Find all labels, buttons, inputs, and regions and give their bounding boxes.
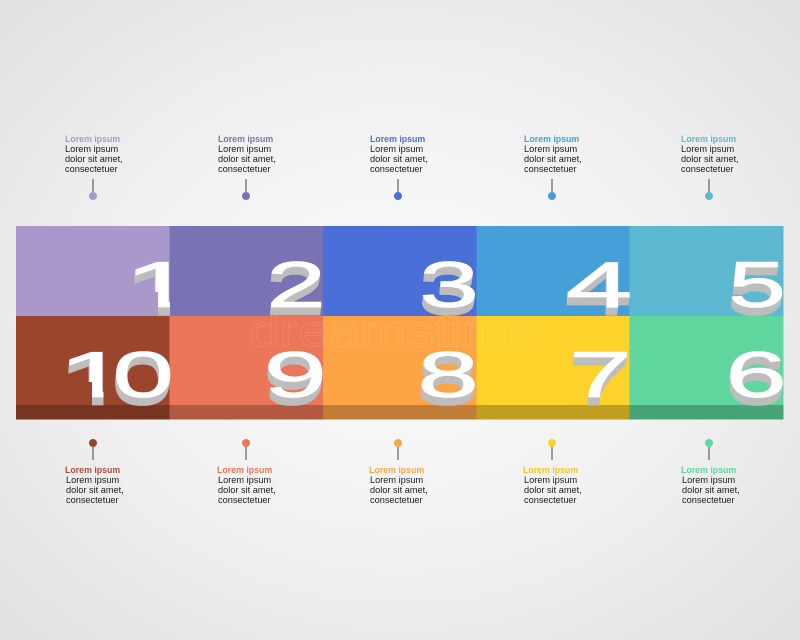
panel: colour grid [16,226,784,420]
number 5: 5 [728,253,786,325]
callout 8: dolor sit amet, [370,485,428,495]
number 2: 2 [266,248,326,321]
callout 1: Lorem ipsum [65,144,118,154]
callout 6: consectetuer [682,495,735,505]
number 4: 4 [565,255,632,327]
number 8: 8 [418,339,479,411]
number 7: 7 [568,340,632,413]
callout 2: Lorem ipsum [218,134,273,144]
callout 5: consectetuer [681,164,734,174]
number 9: 9 [263,344,326,417]
number 5: 5 [727,255,785,327]
number 2: 2 [266,252,326,325]
number 9: 9 [263,342,326,415]
callout 1: dolor sit amet, [65,154,123,164]
callout 5: Lorem ipsum [681,144,734,154]
number 9: 9 [264,338,327,411]
number 2: 2 [265,256,325,329]
callout 2 [218,134,276,200]
number 9: 9 [263,340,327,413]
number 4: 4 [565,251,632,323]
number 7: 7 [568,344,631,417]
number 6: 6 [725,343,786,415]
number 9: 9 [263,346,326,419]
number 6: 6 [726,339,787,411]
number 3: 3 [418,256,478,329]
callout 8: Lorem ipsum [370,475,423,485]
callout 6: Lorem ipsum [682,475,735,485]
callout 10: Lorem ipsum [66,475,119,485]
number 10: 1 [57,342,130,415]
number 1: 1 [123,250,196,323]
callout 2: Lorem ipsum [218,144,271,154]
callout 5: Lorem ipsum [681,134,736,144]
callout 3: Lorem ipsum [370,134,425,144]
number 4: 4 [566,249,632,321]
number 10: 0 [113,339,174,411]
number 2: 2 [266,250,326,323]
callout 7 [523,439,582,505]
callout 7: consectetuer [524,495,577,505]
number 8: 8 [417,341,479,413]
number 10: 1 [57,346,129,419]
number 1: 1 [123,254,195,327]
number 8: 8 [417,347,478,419]
callout 3: consectetuer [370,164,423,174]
number 5: 5 [728,251,786,323]
number 3: 3 [419,248,479,321]
number 5: 5 [728,249,786,321]
callout 7: Lorem ipsum [524,475,577,485]
callout 4: consectetuer [524,164,577,174]
callout 9: consectetuer [218,495,271,505]
callout 6: dolor sit amet, [682,485,740,495]
callout 10: consectetuer [66,495,119,505]
callout 8: Lorem ipsum [369,465,424,475]
callout 6: Lorem ipsum [681,465,736,475]
number 4: 4 [565,253,632,325]
callout 10 [65,439,124,505]
number 2: 2 [266,254,325,327]
callout 4 [524,134,582,200]
number 8: 8 [417,345,478,417]
number 1: 1 [123,256,195,329]
callout 3: dolor sit amet, [370,154,428,164]
callout 9: Lorem ipsum [217,465,272,475]
number 10: 1 [57,344,129,417]
callout 1 [65,134,123,200]
callout 4: Lorem ipsum [524,134,579,144]
callout 10: Lorem ipsum [65,465,120,475]
number 10: 0 [112,343,174,415]
number 1: 1 [124,248,196,321]
number 1 [134,262,170,316]
callout 6 [681,439,740,505]
number 7: 7 [569,338,632,411]
callout 1: consectetuer [65,164,118,174]
callout 8 [369,439,428,505]
callout 2: dolor sit amet, [218,154,276,164]
number 10: 0 [112,345,173,417]
number 1: 1 [123,252,196,325]
callout 9: Lorem ipsum [218,475,271,485]
callout 4: Lorem ipsum [524,144,577,154]
number 3: 3 [419,254,478,327]
number 6: 6 [725,347,786,419]
number 10: 1 [57,340,130,413]
callout 3 [370,134,428,200]
number 4: 4 [565,257,632,329]
number 10: 1 [58,338,130,411]
callout 1: Lorem ipsum [65,134,120,144]
number 3: 3 [419,252,478,325]
number 7: 7 [568,346,631,419]
callout 9: dolor sit amet, [218,485,276,495]
number 6: 6 [725,341,787,413]
number 10 [68,351,170,406]
number 5: 5 [727,257,785,329]
callout 8: consectetuer [370,495,423,505]
number 6: 6 [725,345,786,417]
callout 7: dolor sit amet, [524,485,582,495]
number 10: 0 [112,347,173,419]
watermark: dreamstime [249,307,539,356]
callout 2: consectetuer [218,164,271,174]
callout 5: dolor sit amet, [681,154,739,164]
callout 9 [217,439,276,505]
callout 7: Lorem ipsum [523,465,578,475]
callout 10: dolor sit amet, [66,485,124,495]
callout 5 [681,134,739,200]
number 3: 3 [419,250,479,323]
callout 3: Lorem ipsum [370,144,423,154]
number 8: 8 [417,343,478,415]
callout 4: dolor sit amet, [524,154,582,164]
number 7: 7 [568,342,632,415]
number 10: 0 [112,341,174,413]
